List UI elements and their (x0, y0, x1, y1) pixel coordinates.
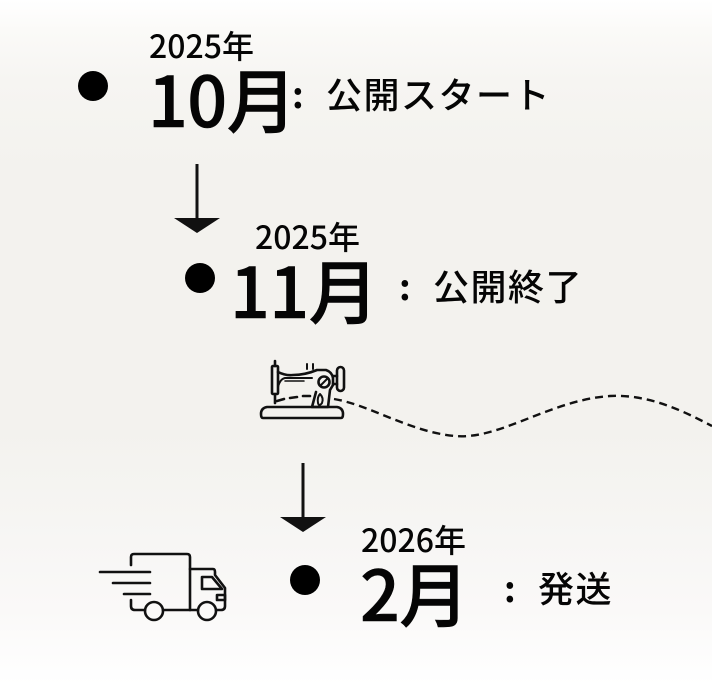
timeline step: February 2026 (290, 516, 613, 642)
month: 10月 (148, 47, 296, 148)
year: 2025年 (149, 22, 254, 68)
description: 公開スタート (326, 67, 551, 119)
month: 2月 (360, 541, 469, 642)
timeline step: November 2025 (185, 213, 583, 339)
label: : (504, 561, 516, 613)
description: 公開終了 (433, 259, 583, 311)
year: 2025年 (255, 213, 360, 259)
bullet (290, 565, 320, 595)
bullet (78, 71, 108, 101)
year: 2026年 (361, 516, 466, 562)
description: 発送 (538, 561, 613, 613)
label: : (399, 259, 411, 311)
timeline step: October 2025 (78, 22, 551, 148)
bullet (185, 263, 215, 293)
label: : (292, 67, 304, 119)
month: 11月 (230, 238, 378, 339)
